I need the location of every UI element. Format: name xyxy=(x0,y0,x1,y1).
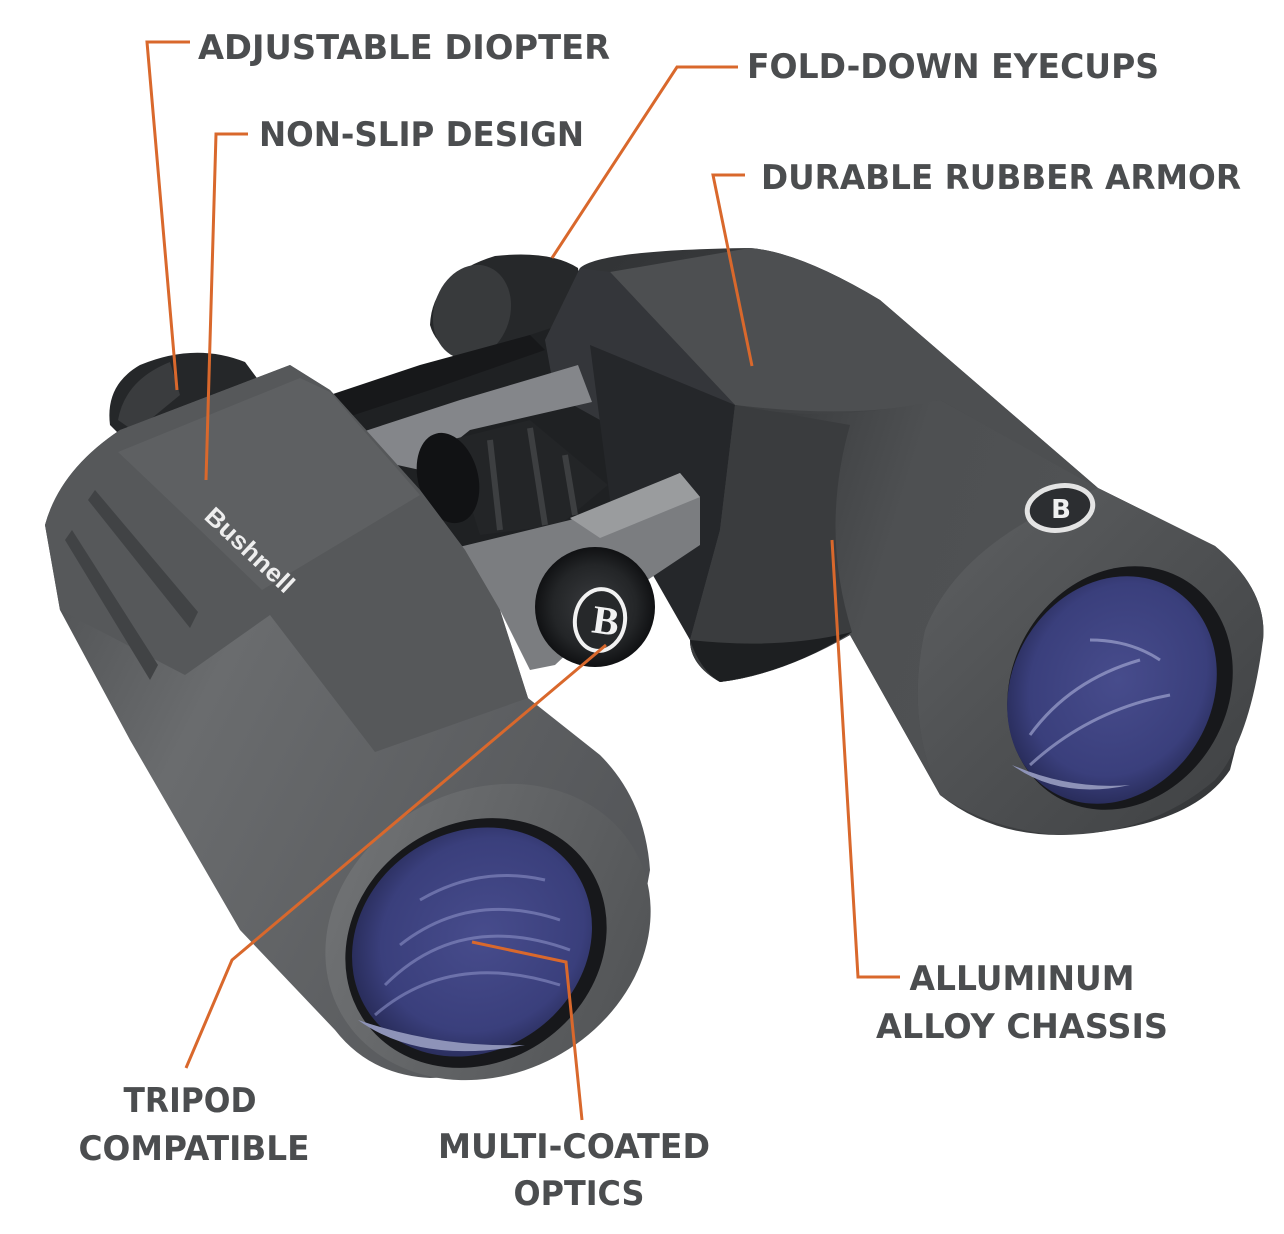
grip ridges xyxy=(88,490,198,628)
brand wordmark: Bushnell xyxy=(199,502,300,599)
front barrel section xyxy=(690,400,1098,795)
dark area behind the central mechanism xyxy=(335,325,720,550)
callout: aluminum alloy chassis: ALLUMINUM xyxy=(910,959,1134,999)
rear eyecup, right xyxy=(421,254,590,369)
brand badge xyxy=(1024,481,1096,535)
callout: non-slip design xyxy=(206,115,584,480)
rear eyecup, left xyxy=(109,353,262,445)
callout: aluminum alloy chassis: ALLOY CHASSIS xyxy=(876,1007,1168,1047)
callout: fold-down eyecups xyxy=(552,47,1159,258)
rear body section xyxy=(45,365,528,752)
callout: adjustable diopter: ADJUSTABLE DIOPTER xyxy=(198,28,610,68)
callout: fold-down eyecups: FOLD-DOWN EYECUPS xyxy=(747,47,1159,87)
non-slip panel xyxy=(118,378,420,590)
right objective lens xyxy=(918,488,1277,851)
lower hinge plate xyxy=(455,473,700,670)
hinge knob with B logo xyxy=(535,547,655,667)
callout: aluminum alloy chassis xyxy=(832,540,1168,1047)
callout: durable rubber armor: DURABLE RUBBER ARMOR xyxy=(761,158,1241,198)
top raised panel xyxy=(610,248,1098,488)
left barrel xyxy=(45,365,650,1078)
upper hinge plate xyxy=(330,335,545,418)
callout: adjustable diopter xyxy=(147,28,610,390)
callout: tripod compatible: COMPATIBLE xyxy=(78,1129,310,1169)
callout: multi-coated optics: OPTICS xyxy=(514,1174,644,1214)
left objective lens xyxy=(273,728,703,1136)
callout: non-slip design: NON-SLIP DESIGN xyxy=(259,115,584,155)
right barrel xyxy=(545,248,1263,835)
callout: multi-coated optics xyxy=(438,942,710,1214)
callout: multi-coated optics: MULTI-COATED xyxy=(438,1127,710,1167)
hinge knob with B logo: B xyxy=(590,596,622,645)
callout: tripod compatible xyxy=(78,645,606,1169)
binoculars illustration xyxy=(45,248,1277,1136)
callout: durable rubber armor xyxy=(713,158,1241,366)
brand badge: B xyxy=(1051,495,1071,525)
focus wheel xyxy=(407,420,608,535)
callout: tripod compatible: TRIPOD xyxy=(124,1081,256,1121)
